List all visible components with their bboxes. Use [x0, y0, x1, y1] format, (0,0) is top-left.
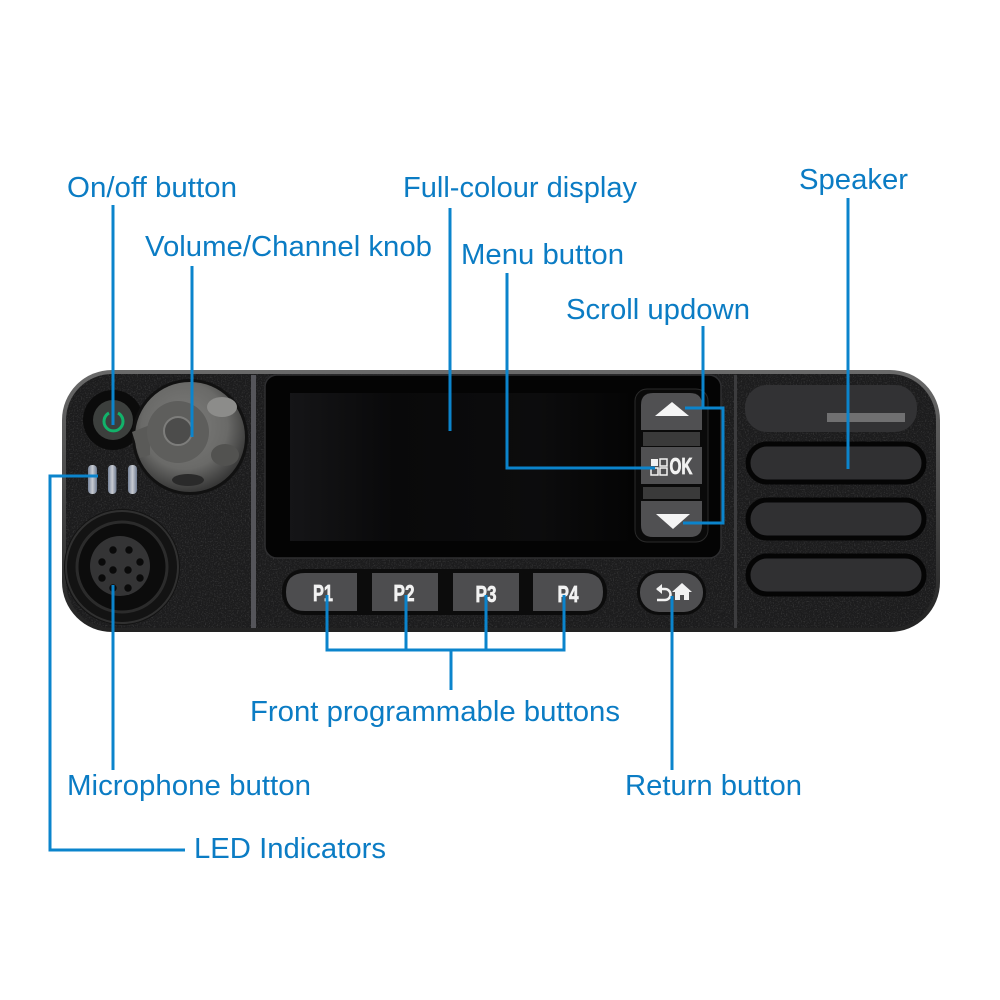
callout: speaker: Speaker [799, 164, 908, 196]
scroll and menu button cluster [635, 389, 708, 542]
callout: front programmable buttons [250, 595, 620, 728]
callout: front programmable buttons: Front programmable buttons [250, 696, 620, 728]
device body [62, 370, 940, 632]
P1 button [286, 573, 357, 611]
menu OK button: OK [670, 453, 693, 479]
menu OK button [641, 447, 702, 484]
LED indicators [88, 465, 137, 494]
callout: volume/channel knob: Volume/Channel knob [145, 231, 432, 263]
volume/channel knob [132, 379, 248, 495]
callout: menu button: Menu button [461, 239, 624, 271]
callout: scroll updown: Scroll updown [566, 294, 750, 326]
callout: return button: Return button [625, 770, 802, 802]
callout: on/off button: On/off button [67, 172, 237, 204]
full-colour display [265, 375, 721, 558]
callout: LED indicators: LED Indicators [194, 833, 386, 865]
P3 button [453, 573, 519, 611]
callout: LED indicators [50, 476, 386, 865]
P3 button: P3 [476, 581, 496, 607]
microphone connector [64, 509, 180, 625]
programmable buttons [282, 569, 607, 615]
callout: scroll updown [566, 294, 750, 523]
callout: full-colour display: Full-colour display [403, 172, 637, 204]
callout: microphone button: Microphone button [67, 770, 311, 802]
callout: menu button [461, 239, 655, 468]
scroll down button [641, 501, 702, 537]
radio front panel [62, 370, 940, 632]
P2 button: P2 [394, 580, 414, 606]
P1 button: P1 [313, 580, 333, 606]
P2 button [372, 573, 438, 611]
on/off button [83, 390, 143, 450]
speaker grille slots [748, 444, 924, 594]
scroll up button [641, 393, 702, 430]
P4 button [533, 573, 603, 611]
return/home button [637, 570, 706, 615]
speaker name plate [745, 385, 917, 432]
P4 button: P4 [558, 581, 579, 607]
